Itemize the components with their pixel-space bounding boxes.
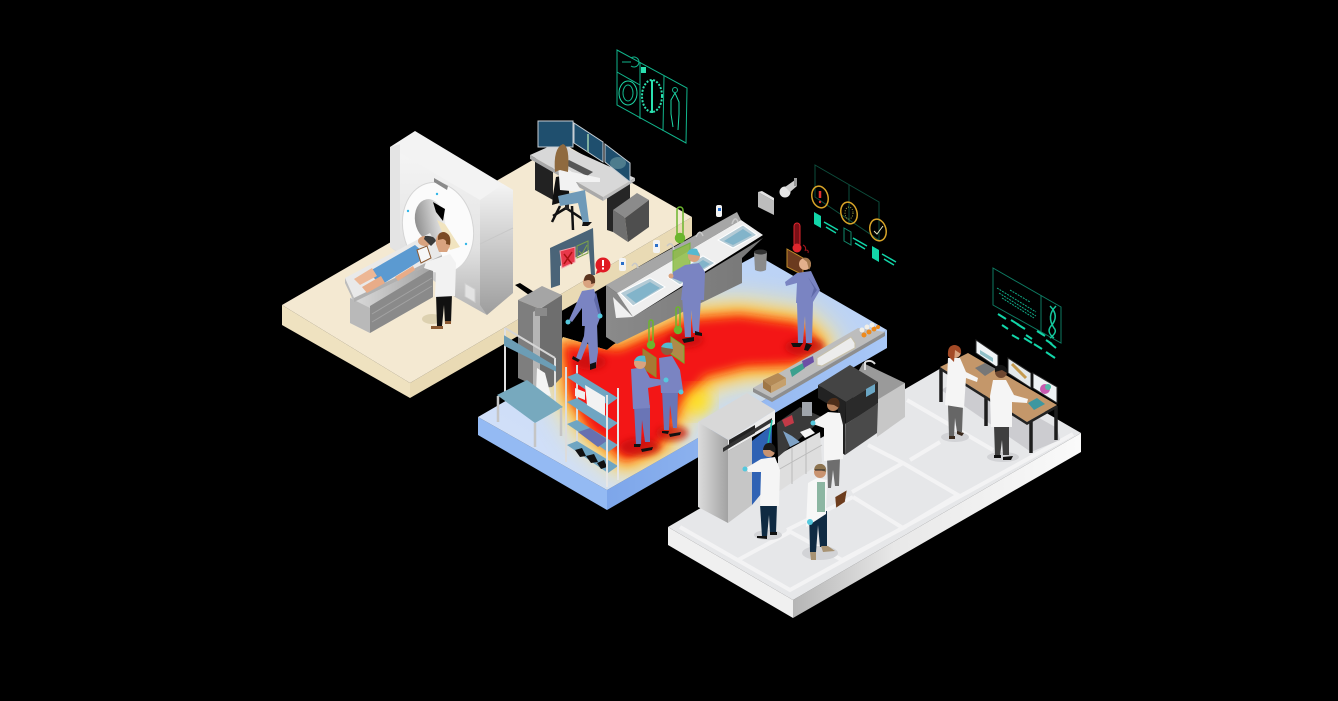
- icon: CT scanner gantry: [390, 131, 513, 315]
- figure: scrub rear: [659, 342, 684, 437]
- panel: clean room platform: [478, 255, 887, 510]
- icon: red thermometer: [792, 223, 808, 253]
- accept sign: [577, 241, 588, 258]
- icon: silver equipment: [845, 361, 905, 437]
- panel: alert dashboard: [809, 165, 896, 265]
- icon: soap dispensers: [619, 205, 722, 271]
- icon: air shower unit: [518, 286, 562, 390]
- figure: doctor with tablet: [417, 232, 456, 329]
- figure: scrub at sink: [668, 249, 705, 343]
- monitor: right: [605, 144, 630, 182]
- icon: security gate: [550, 228, 595, 288]
- icon: lab counter: [777, 402, 824, 492]
- figure: analyst left: [941, 345, 978, 442]
- icon: test tube racks: [790, 356, 814, 377]
- ring: [394, 176, 482, 280]
- icon: waste bin: [754, 250, 767, 272]
- figure: lab tech with clipboard: [802, 464, 847, 560]
- icon: operator desk and workstation: [530, 121, 635, 232]
- icon: cardboard boxes: [763, 373, 786, 393]
- icon: green thermometers and panels: [643, 307, 684, 377]
- panel: genomics dashboard: [993, 268, 1061, 358]
- reject sign: [560, 247, 575, 268]
- icon: security camera: [780, 178, 797, 198]
- monitor: analyst left: [976, 340, 998, 368]
- icon: alert bubble: [596, 258, 610, 274]
- heat map: [563, 316, 825, 460]
- monitor: left: [538, 121, 573, 147]
- basins: [620, 225, 757, 306]
- icon: analyst desk: [940, 340, 1060, 453]
- figure: analyst right: [987, 365, 1028, 462]
- figure: seated operator: [552, 144, 600, 230]
- figure: lab tech at counter: [810, 398, 843, 488]
- icon: patient table: [345, 233, 442, 333]
- icon: green panel top: [673, 243, 690, 273]
- figure: scrub front: [631, 356, 668, 452]
- icon: green thermometer top: [676, 207, 684, 242]
- monitor: analyst right: [1033, 373, 1057, 403]
- panel: supply tray on ledge: [753, 322, 885, 402]
- icon: scrub sink station: [606, 212, 763, 344]
- figure: nurse supervisor: [785, 249, 820, 351]
- icon: supply shelf: [566, 365, 618, 487]
- icon: gowning bench: [497, 328, 563, 447]
- monitor: centre: [574, 123, 603, 162]
- icon: black analyzer: [818, 365, 878, 455]
- panel: data dashboard, anatomy: [617, 50, 687, 143]
- figure: patient: [354, 236, 436, 293]
- icon: wall sensor box: [758, 191, 774, 215]
- panel: imaging room platform: [282, 143, 692, 398]
- icon: PC tower: [613, 193, 649, 242]
- icon: orange vials: [862, 325, 880, 338]
- figure: lab tech at freezer: [742, 443, 782, 540]
- panel: laboratory platform: [668, 360, 1081, 618]
- monitor: analyst centre: [1008, 358, 1031, 388]
- icon: white rack: [817, 337, 855, 366]
- icon: freezer: [698, 393, 775, 523]
- figure: scrub walker: [566, 274, 602, 370]
